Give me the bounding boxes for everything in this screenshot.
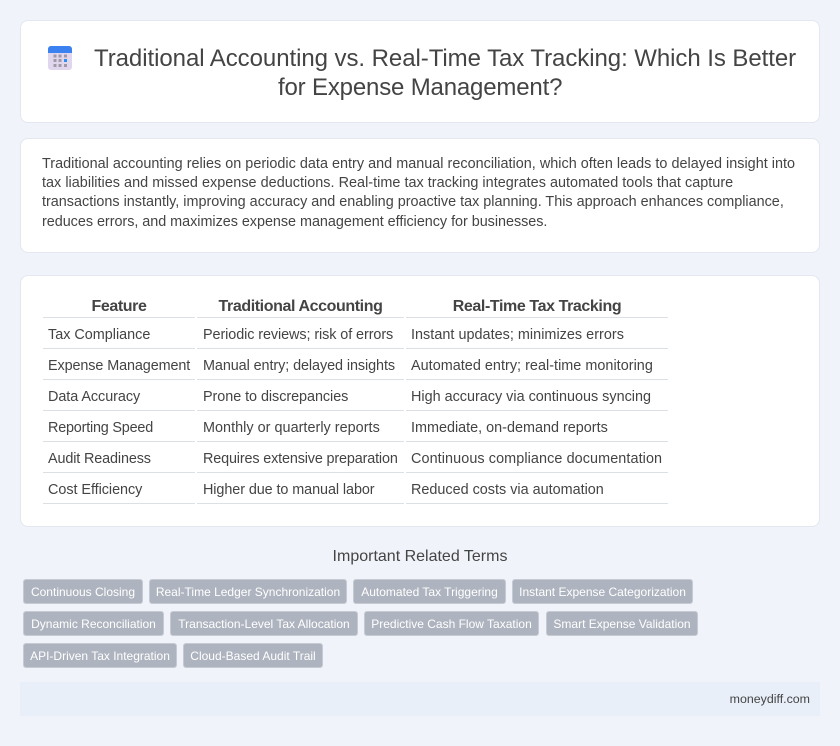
header panel xyxy=(20,20,820,123)
comparison table: Immediate, on-demand reports xyxy=(411,420,608,436)
tag list: Transaction-Level Tax Allocation xyxy=(178,617,350,631)
comparison table: Instant updates; minimizes errors xyxy=(411,327,624,343)
comparison table: Feature xyxy=(92,298,146,315)
comparison table: Cost Efficiency xyxy=(48,482,142,498)
comparison table: Audit Readiness xyxy=(48,451,151,467)
tag list: Automated Tax Triggering xyxy=(361,585,498,599)
title xyxy=(94,45,796,101)
comparison table: Requires extensive preparation xyxy=(203,451,398,467)
comparison table: Periodic reviews; risk of errors xyxy=(203,327,393,343)
intro text: tax liabilities and missed expense deductions. Real-time tax tracking integrates automated tools that capture xyxy=(42,175,733,191)
comparison table: High accuracy via continuous syncing xyxy=(411,389,651,405)
footer bar xyxy=(20,682,820,716)
comparison table: Data Accuracy xyxy=(48,389,140,405)
icon: calendar xyxy=(48,46,72,70)
footer source: moneydiff.com xyxy=(730,692,810,706)
title: Traditional Accounting vs. Real-Time Tax Tracking: Which Is Better xyxy=(94,45,796,72)
title: for Expense Management? xyxy=(278,74,562,101)
comparison table: Manual entry; delayed insights xyxy=(203,358,395,374)
tag list: API-Driven Tax Integration xyxy=(30,649,170,663)
tag list: Cloud-Based Audit Trail xyxy=(190,649,316,663)
comparison table: Automated entry; real-time monitoring xyxy=(411,358,653,374)
tag list: Continuous Closing xyxy=(31,585,135,599)
comparison table: Tax Compliance xyxy=(48,327,150,343)
tag list: Predictive Cash Flow Taxation xyxy=(371,617,532,631)
comparison table: Real-Time Tax Tracking xyxy=(453,298,621,315)
comparison table: Reduced costs via automation xyxy=(411,482,604,498)
panel: intro paragraph xyxy=(20,138,820,253)
comparison table: Monthly or quarterly reports xyxy=(203,420,380,436)
intro text xyxy=(42,156,795,230)
tag list: Dynamic Reconciliation xyxy=(31,617,156,631)
tag list xyxy=(23,579,698,668)
panel: comparison table xyxy=(20,275,820,527)
comparison table: Continuous compliance documentation xyxy=(411,451,662,467)
comparison table: Prone to discrepancies xyxy=(203,389,348,405)
tag list: Instant Expense Categorization xyxy=(519,585,686,599)
comparison table: Expense Management xyxy=(48,358,190,374)
intro text: reduces errors, and maximizes expense management efficiency for businesses. xyxy=(42,214,547,230)
comparison table xyxy=(43,298,668,504)
tag list: Smart Expense Validation xyxy=(553,617,691,631)
tag list: Real-Time Ledger Synchronization xyxy=(156,585,340,599)
comparison table: Traditional Accounting xyxy=(219,298,382,315)
intro text: Traditional accounting relies on periodic data entry and manual reconciliation, which often leads to delayed insight into xyxy=(42,156,795,172)
intro text: transactions instantly, improving accuracy and enabling proactive tax planning. This approach enhances compliance, xyxy=(42,194,784,210)
comparison table: Higher due to manual labor xyxy=(203,482,375,498)
comparison table: Reporting Speed xyxy=(48,420,153,436)
heading: important related terms: Important Related Terms xyxy=(333,548,507,565)
